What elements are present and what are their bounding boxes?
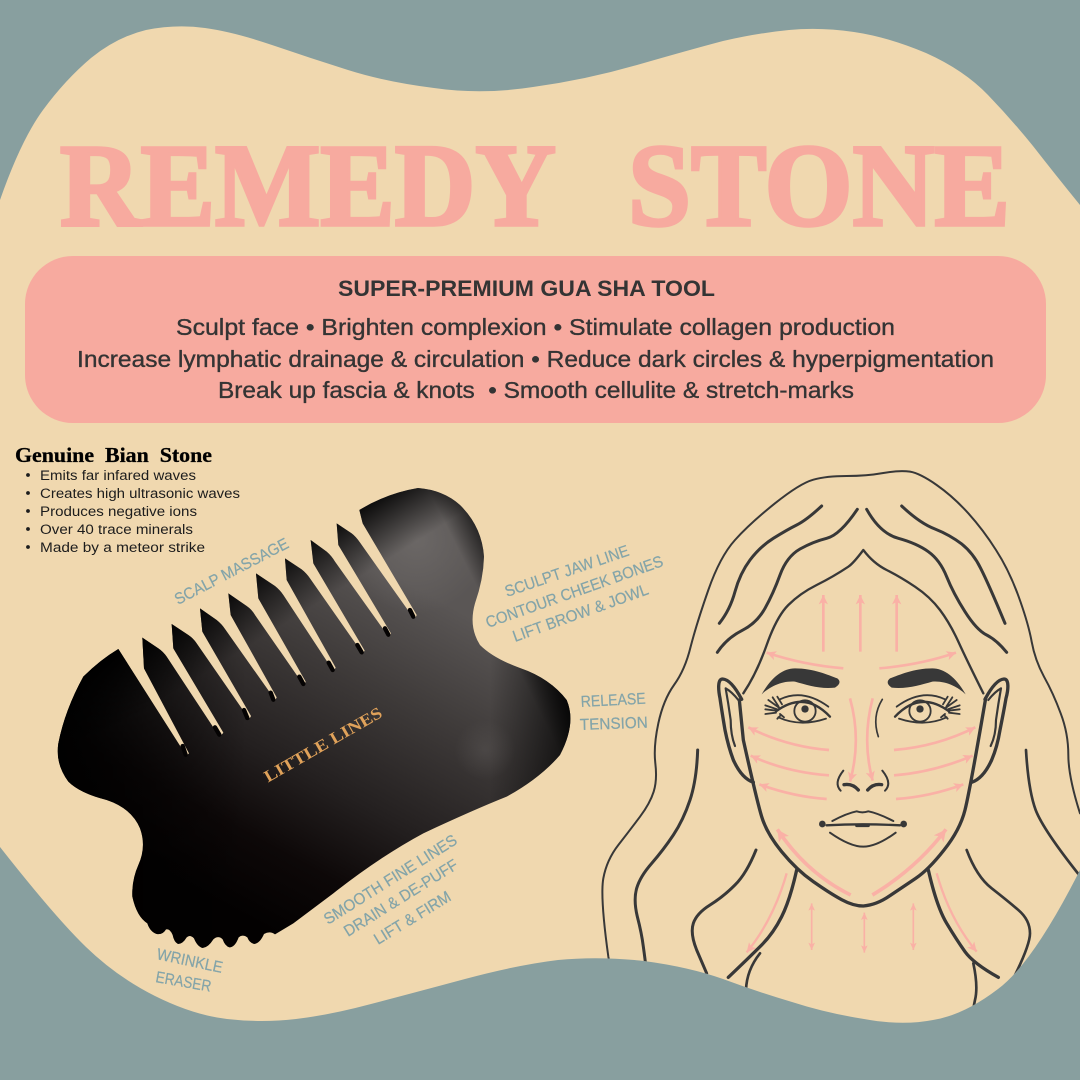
bullet list	[26, 468, 240, 555]
panel: benefits	[25, 256, 1046, 423]
right ear	[972, 679, 1008, 782]
right eye	[895, 695, 960, 723]
nose	[838, 699, 888, 791]
jaw and neck arrows	[747, 829, 977, 953]
bullet list: Made by a meteor strike	[40, 540, 205, 555]
subheading: Genuine Bian Stone	[15, 443, 212, 467]
lips	[819, 811, 907, 847]
forehead and brow arrows	[767, 595, 956, 668]
eyebrows	[762, 668, 966, 694]
benefits text: Break up fascia & knots • Smooth cellulite & stretch-marks	[218, 377, 854, 403]
label: sculpt, contour, lift: SCULPT JAW LINE	[503, 543, 631, 601]
label: release tension	[580, 691, 648, 734]
label: sculpt, contour, lift: CONTOUR CHEEK BONES	[484, 553, 666, 632]
title	[60, 120, 1010, 251]
title: REMEDY	[60, 120, 556, 251]
label: scalp massage: SCALP MASSAGE	[172, 535, 292, 609]
label: wrinkle eraser: ERASER	[154, 969, 212, 996]
bullet list: Creates high ultrasonic waves	[40, 486, 240, 501]
bullet list: Over 40 trace minerals	[40, 522, 193, 537]
hair lines	[602, 471, 1080, 988]
title: STONE	[628, 120, 1010, 251]
label: release tension: TENSION	[580, 715, 648, 734]
panel heading: SUPER-PREMIUM GUA SHA TOOL	[338, 276, 715, 301]
bullet list: Produces negative ions	[40, 504, 197, 519]
bullet list: Emits far infared waves	[40, 468, 196, 483]
cheek and nose arrows	[748, 698, 975, 799]
label: smooth, drain, lift: DRAIN & DE-PUFF	[341, 857, 462, 940]
label: wrinkle eraser: WRINKLE	[155, 946, 224, 977]
brand logo: LITTLE LINES	[260, 703, 385, 786]
neck and shoulders	[728, 870, 998, 1017]
left ear	[719, 679, 753, 782]
genuine bian stone text block	[15, 443, 240, 555]
face illustration	[602, 471, 1080, 1017]
left eye	[765, 695, 830, 723]
jaw line	[739, 698, 986, 906]
slit shadows	[183, 610, 413, 755]
label: wrinkle eraser	[154, 946, 224, 996]
label: smooth, drain, lift: LIFT & FIRM	[371, 889, 454, 948]
benefits text	[77, 314, 994, 403]
benefits text: Increase lymphatic drainage & circulation • Reduce dark circles & hyperpigmentation	[77, 346, 994, 372]
label: release tension: RELEASE	[580, 691, 646, 711]
label: smooth, drain, lift: SMOOTH FINE LINES	[321, 832, 460, 928]
benefits text: Sculpt face • Brighten complexion • Stimulate collagen production	[176, 314, 895, 340]
gua sha tool	[58, 488, 570, 948]
label: sculpt, contour, lift: LIFT BROW & JOWL	[511, 582, 651, 646]
